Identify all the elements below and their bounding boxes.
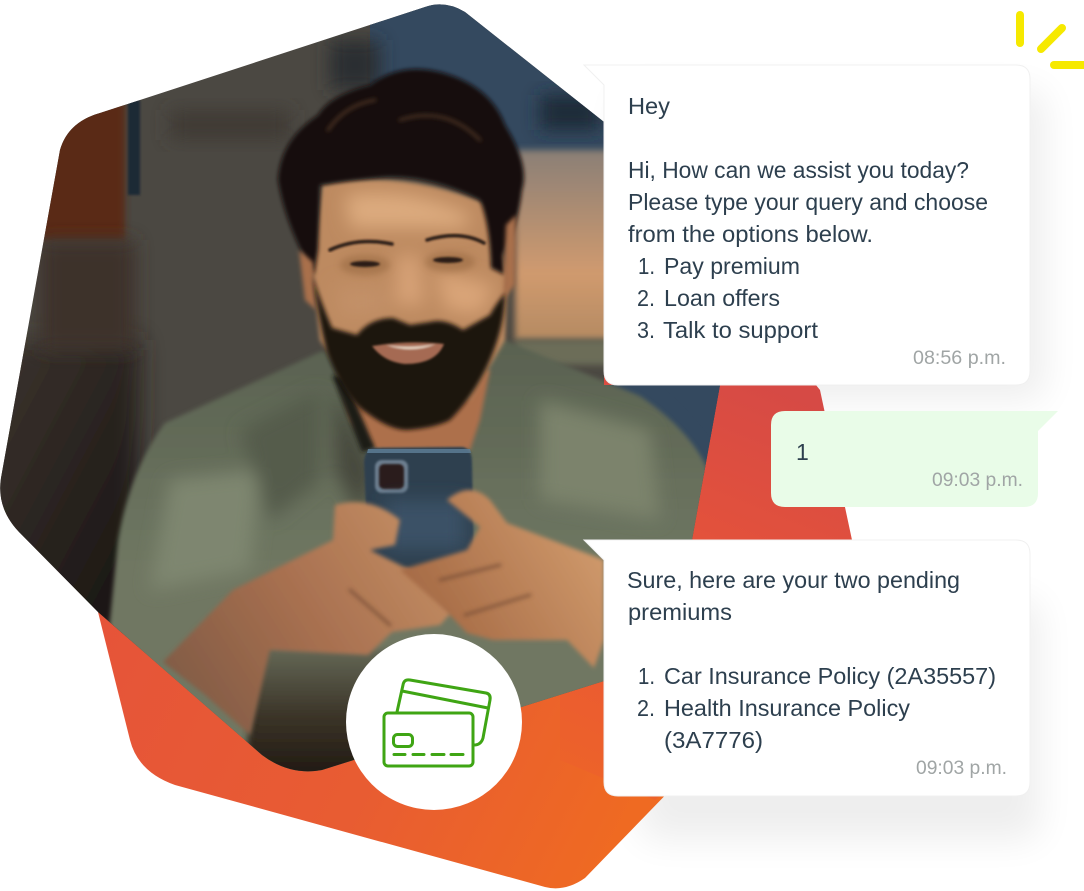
dark gap below hands	[243, 649, 384, 772]
chat bubble: pending premiums: Health Insurance Policy	[664, 695, 911, 721]
shirt shading	[150, 390, 660, 590]
chat bubble: pending premiums: Car Insurance Policy (2A35557)	[664, 663, 996, 689]
chat bubble: pending premiums: Sure, here are your two pending	[627, 567, 960, 593]
chat bubble: pending premiums: (3A7776)	[664, 727, 763, 753]
chat bubble: bot greeting: 08:56 p.m.	[913, 348, 1006, 369]
neck	[338, 370, 490, 450]
chat bubble: pending premiums: 1.	[638, 663, 655, 689]
panel: soft bubble shadows	[620, 90, 1045, 840]
chat bubble: user reply: 09:03 p.m.	[932, 470, 1023, 491]
chat bubble: bot greeting: 2.	[637, 285, 655, 311]
chat bubble: bot greeting: Hey	[628, 93, 671, 119]
chat bubble: user reply: 1	[796, 439, 809, 465]
beard	[313, 277, 505, 430]
chat bubble: bot greeting: Talk to support	[663, 317, 819, 343]
hair highlights	[328, 100, 480, 140]
ears	[299, 215, 516, 310]
panel: orange hexagon backdrop	[98, 120, 852, 888]
chat bubble: bot greeting: Pay premium	[664, 253, 800, 279]
phone	[363, 446, 476, 569]
background blue behind right shoulder	[710, 386, 720, 438]
chat bubble: bot greeting: 3.	[637, 317, 655, 343]
icon: credit cards in white circle	[346, 634, 522, 810]
photo background room	[0, 0, 730, 800]
chat bubble: bot greeting: from the options below.	[628, 221, 873, 247]
shirt	[108, 338, 708, 790]
decorative yellow spark icon	[1020, 15, 1084, 65]
chat bubble: bot greeting	[584, 65, 1030, 385]
right hand	[400, 490, 604, 668]
chat bubble: bot greeting: 1.	[638, 253, 655, 279]
mouth	[372, 342, 444, 364]
eyebrows	[330, 236, 484, 250]
chat bubble: pending premiums: premiums	[628, 599, 732, 625]
left forearm and hand	[163, 502, 452, 735]
finger shadows	[350, 565, 530, 625]
chat bubble: bot greeting: Please type your query and choose	[628, 189, 988, 215]
back card	[397, 680, 490, 745]
front card	[384, 713, 473, 766]
chat bubble: pending premiums	[584, 540, 1030, 796]
eye sockets	[340, 252, 475, 275]
hair	[278, 69, 524, 275]
face	[312, 180, 508, 400]
collar shadow	[332, 375, 375, 452]
chat bubble: bot greeting: Loan offers	[664, 285, 780, 311]
chat bubble: user reply	[771, 411, 1058, 507]
chat bubble: pending premiums: 09:03 p.m.	[916, 758, 1007, 779]
chat bubble: pending premiums: 2.	[637, 695, 655, 721]
chat bubble: bot greeting: Hi, How can we assist you today?	[628, 157, 969, 183]
eyes	[350, 257, 463, 267]
panel: photo of man using phone	[0, 0, 730, 800]
forehead and cheek highlight	[335, 192, 495, 320]
